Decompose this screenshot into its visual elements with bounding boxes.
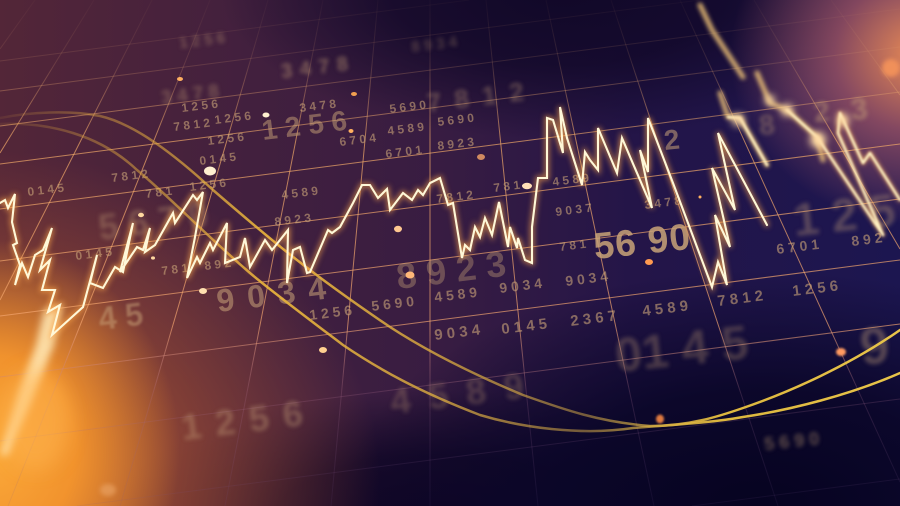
sharp small number labels: 6 7 0 1 [775, 236, 820, 257]
blurred background number labels: 3 [849, 92, 869, 127]
large number labels: 9 0 3 4 [214, 270, 330, 319]
sharp small number labels: 7 8 1 2 [716, 288, 764, 310]
sharp small number labels: 4 5 8 9 [433, 284, 478, 305]
sharp small number labels: 4 5 8 9 [641, 298, 689, 320]
blurred line: far section [700, 5, 823, 165]
sharp small number labels: 5 6 9 0 [389, 98, 427, 116]
blurred background number labels: 1 2 5 [791, 184, 898, 246]
curved trend lines [0, 112, 900, 431]
sharp small number labels: 9 0 3 7 [555, 201, 593, 219]
blurred background number labels: 7 8 1 2 [425, 76, 528, 118]
sharp small number labels: 0 1 4 5 [27, 181, 65, 199]
blurred background number labels: 01 4 5 [613, 316, 751, 383]
blurred line hot spots [732, 95, 849, 148]
sharp small number labels: 8 9 2 3 [274, 211, 312, 229]
near line glow [817, 113, 900, 235]
sharp small number labels: 1 2 5 6 [189, 176, 227, 194]
sharp small number labels: 8 9 2 [204, 256, 232, 273]
large number labels: 8 9 2 3 [394, 243, 508, 297]
blurred background number labels: 8 9 3 4 [410, 33, 459, 56]
glowing data dots [100, 59, 900, 496]
sharp small number labels: 8 9 2 3 [437, 135, 475, 153]
sharp small number labels: 7 8 1 [161, 261, 189, 278]
sharp small number labels: 4 5 8 9 [387, 120, 425, 138]
sharp small number labels: 3 4 7 8 [299, 97, 337, 115]
sharper line: near section [728, 110, 900, 235]
sharp small number labels: 9 0 3 4 [564, 268, 609, 289]
sharp small number labels: 8 9 2 [850, 229, 883, 249]
sharp small number labels: 1 2 5 6 [214, 109, 252, 127]
blurred background number labels: 5 6 7 0 [96, 194, 210, 248]
large number labels [96, 105, 693, 337]
blurred background number labels [96, 30, 898, 454]
sharp small number labels: 5 6 9 0 [437, 111, 475, 129]
blurred background number labels: 9 [857, 316, 892, 377]
sharp small number labels: 5 6 9 0 [370, 293, 415, 314]
sharp small number labels: 4 5 8 9 [281, 184, 319, 202]
sharp small number labels [27, 97, 883, 344]
sharp small number labels: 1 2 5 6 [791, 278, 839, 300]
sharp small number labels: 1 2 5 6 [181, 97, 219, 115]
sharp small number labels: 6 7 0 1 [385, 143, 423, 161]
sharp small number labels: 1 2 5 6 [207, 130, 245, 148]
bottom left light bloom [2, 370, 70, 470]
sharp small number labels: 7 8 1 2 [111, 167, 149, 185]
sharp small number labels: 9 0 3 4 [498, 275, 543, 296]
sharp small number labels: 3 4 7 8 [644, 194, 682, 212]
sharp small number labels: 0 1 4 5 [500, 316, 548, 338]
blurred background number labels: 1 2 5 6 [179, 392, 307, 448]
lower trend curve [0, 124, 900, 431]
blurred background number labels: 3 4 7 8 [160, 81, 220, 109]
blurred background number labels: 5 6 9 0 [763, 428, 820, 454]
sharp small number labels: 4 5 8 9 [552, 171, 590, 189]
sharp small number labels: 0 1 4 5 [199, 150, 237, 168]
sharp small number labels: 7 8 1 [493, 178, 521, 195]
blurred background number labels: 8 [757, 109, 776, 141]
large number labels: 56 90 [592, 216, 693, 267]
price line glow [0, 107, 767, 335]
blurred background number labels: 3 4 7 8 [280, 53, 350, 83]
sharp small number labels: 7 8 1 2 [436, 188, 474, 206]
sharp small number labels: 6 7 0 4 [339, 131, 377, 149]
orange glow streak at lower left [0, 305, 62, 455]
sharp small number labels: 7 8 1 2 [173, 116, 211, 134]
price line core [0, 107, 767, 335]
large number labels: 1 2 5 6 [260, 105, 349, 146]
jagged price line main [0, 107, 767, 335]
blurred background number labels: 2 [812, 96, 831, 128]
blurred background number labels: 1 2 5 6 [178, 30, 226, 52]
sharp small number labels: 7 8 1 [145, 184, 173, 201]
blurred background number labels: 4 5 8 9 [388, 364, 530, 422]
sharp small number labels: 1 2 5 6 [308, 302, 353, 323]
large number labels: 2 [662, 124, 681, 156]
sharp small number labels: 9 0 3 4 [433, 321, 482, 344]
sharp small number labels: 7 8 1 [559, 237, 587, 254]
upper trend curve [0, 112, 900, 426]
blurred price line continuation, top right [700, 5, 900, 235]
sharp small number labels: 2 3 6 7 [569, 308, 617, 330]
large number labels: 4 5 [96, 296, 145, 337]
sharp small number labels: 0 1 4 5 [75, 245, 113, 263]
